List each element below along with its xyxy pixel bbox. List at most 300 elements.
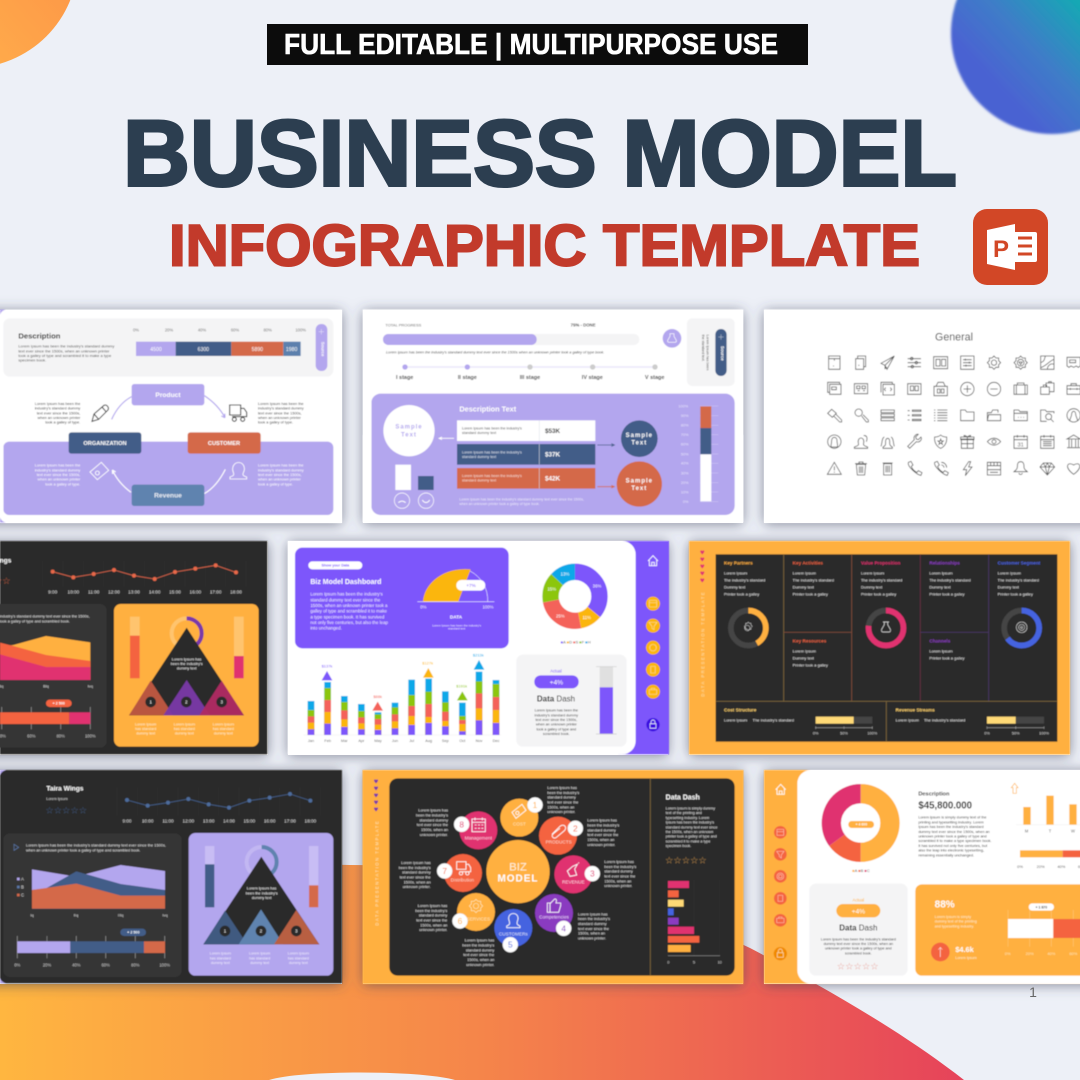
description block: Lorem Ipsum is simply dummy text of the: [918, 816, 986, 820]
heading: Taira Wings: [45, 786, 87, 817]
description block: scrambled it to make a type specimen book.: [918, 839, 992, 843]
slide: general icon set: [764, 309, 1080, 523]
stacked bar chart: Sep: [442, 739, 449, 743]
description block: dummy text ever since the 1500s, when an: [918, 830, 990, 834]
line chart: 12:00: [183, 819, 195, 824]
wheel text blocks: Lorem Ipsum has: [578, 912, 608, 916]
panel: area chart and bar: 100%: [159, 962, 170, 967]
panel: data dash: scrambled book.: [543, 732, 570, 736]
donut legend: ■A ■B ■C: [852, 868, 870, 873]
panel: description and stacked bar: Source: [320, 342, 325, 357]
panel: dashboard intro and gauge: a type specimen book. It has survived: [310, 614, 385, 619]
panel: area chart and bar: B: [21, 885, 24, 890]
text blocks around cycle: [35, 402, 304, 486]
wheel text blocks: text ever since the: [547, 800, 578, 804]
panel: dashboard intro and gauge: into unchanged.: [310, 626, 342, 631]
hearts: ♥: [700, 578, 705, 585]
panel: area chart and bar: 60%: [102, 962, 110, 967]
panel: pyramid chart: dummy text: [250, 961, 269, 965]
line chart: 10:00: [68, 590, 80, 595]
canvas board: Lorem Ipsum: [861, 570, 885, 575]
sidebar icons: [774, 784, 787, 960]
canvas board: Printer took a galley: [929, 655, 965, 660]
circle: sample text white: [383, 405, 435, 456]
wheel text blocks: 1500s, when an: [578, 932, 605, 936]
panel: area chart and bar: 20%: [43, 962, 51, 967]
stacked bar chart: $137k: [322, 663, 332, 668]
wheel text blocks: Lorem Ipsum has: [604, 860, 634, 864]
arrows to circles: [597, 444, 614, 446]
line chart: 17:00: [284, 819, 296, 824]
wheel text blocks: Lorem Ipsum has: [418, 809, 448, 813]
stacked progress column: 40%: [681, 462, 689, 466]
hearts: ♥: [373, 807, 379, 814]
icon: PowerPoint logo: [973, 209, 1048, 285]
description block: unknown printer took a galley of type and: [918, 834, 987, 838]
text blocks around cycle: text ever since the 1500s,: [37, 473, 80, 477]
panel: lavender description: when an unknown printer took a galley of type book.: [459, 502, 540, 506]
wheel text blocks: [399, 786, 636, 967]
wheel text blocks: text ever since the: [417, 823, 448, 827]
panel: pyramid chart: 1: [224, 929, 227, 934]
stacked bar chart: Jan: [308, 739, 314, 743]
wheel text blocks: Lorem Ipsum has: [465, 939, 494, 943]
line chart: 16:00: [264, 819, 276, 824]
vertical label: DATA PRESENTATION TEMPLATE: [374, 821, 379, 926]
panel: dashboard intro and gauge: Biz Model Dashboard: [310, 579, 381, 586]
hearts: ♥: [700, 571, 705, 578]
canvas board: Printer took a galley: [998, 592, 1033, 597]
stages timeline: V stage: [645, 375, 664, 381]
slide shadows: [0, 310, 1080, 984]
donut chart: [831, 794, 890, 852]
petal: competencies: Competencies: [539, 914, 570, 919]
description block: Description: [918, 791, 950, 797]
wheel text blocks: standard dummy: [466, 948, 494, 952]
canvas board: Printer took a galley: [929, 592, 965, 597]
table rows: standard dummy text: [462, 479, 496, 483]
wheel text blocks: unknown printer.: [419, 928, 447, 932]
gauge chart: +7%: [466, 583, 476, 588]
text blocks around cycle: text ever since the 1500s,: [37, 411, 80, 415]
icon: up arrow: [1011, 783, 1018, 793]
wheel text blocks: text ever since the: [587, 833, 618, 837]
text blocks around cycle: took a galley of type.: [258, 421, 293, 425]
slide: dark dashboard orange variant: [0, 541, 267, 754]
text blocks around cycle: when an unknown printer: [38, 478, 81, 482]
panel: area chart and bar: + 2 500: [127, 931, 139, 935]
icon: PowerPoint logo: P: [993, 236, 1009, 263]
panel: area chart and bar: 80%: [57, 733, 65, 738]
line chart: 9:00: [122, 819, 132, 824]
stacked progress column: 60%: [681, 443, 689, 447]
canvas board: Relationships: [929, 560, 960, 565]
table rows: Lorem Ipsum has been the industry's: [462, 450, 522, 454]
wheel text blocks: 1500s, when an: [421, 828, 448, 832]
panel: data dash: Data Dash: [839, 924, 877, 933]
decorative blue blob top right: [951, 0, 1080, 134]
line chart: 10:00: [142, 819, 154, 824]
gauge chart: [417, 569, 494, 631]
wheel text blocks: text ever since the: [604, 874, 635, 878]
panel: source note: Lorem Ipsum has been: [706, 335, 710, 370]
description block: It has survived not only five centuries, but: [918, 844, 988, 848]
canvas board: Dummy text: [861, 585, 883, 590]
panel: 88 percent stats: + 1 870: [1035, 905, 1047, 909]
line chart: 15:00: [169, 590, 181, 595]
panel: pyramid chart: dummy text: [289, 961, 308, 965]
table rows: Lorem Ipsum has been the industry's: [462, 474, 522, 478]
side panel: data dash: text of the printing and: [666, 811, 702, 815]
circle: sample text orange: Text: [631, 486, 647, 492]
panel: description and stacked bar: 4500: [150, 347, 162, 353]
wheel text blocks: 1500s, when an: [604, 879, 631, 883]
wheel text blocks: standard dummy: [419, 818, 448, 822]
panel: data dash: Lorem Ipsum has been the: [535, 709, 578, 713]
wheel diagram: [399, 786, 636, 967]
column chart: T: [1049, 828, 1052, 833]
panel: pyramid chart: Lorem Ipsum: [210, 952, 231, 956]
donut pill: [848, 821, 874, 828]
petal: cost: COST: [513, 822, 526, 827]
box: organization: [69, 432, 141, 454]
circle: sample text navy: Sample: [626, 433, 653, 439]
canvas board: Key Activities: [793, 560, 823, 565]
wheel text blocks: unknown printer.: [578, 936, 606, 940]
panel: dashboard intro and gauge: 1500s, when an unknown printer took a: [310, 603, 388, 608]
panel: pyramid chart: dummy text: [211, 961, 230, 965]
heading: partial title and stars: [0, 557, 12, 587]
donut chart: 25%: [556, 614, 565, 619]
column chart: [1016, 796, 1080, 833]
canvas board: Lorem Ipsum: [929, 648, 953, 653]
small bars and faces: [394, 465, 434, 508]
panel: 88 percent stats: Lorem Ipsum is simply: [935, 915, 971, 919]
number badges: [437, 797, 600, 952]
panel: pyramid chart: has standard: [249, 956, 270, 960]
stacked progress column: 50%: [681, 452, 689, 456]
gauge chart: standard text: [448, 627, 465, 631]
wheel text blocks: standard dummy: [578, 922, 607, 926]
title: BUSINESS MODEL: [123, 100, 957, 206]
progress bar: 0%: [1017, 864, 1023, 869]
text blocks around cycle: industry's standard dummy: [35, 468, 80, 472]
box: revenue: [132, 485, 204, 506]
text blocks around cycle: when an unknown printer: [258, 478, 301, 482]
panel: pyramid chart: has standard: [210, 956, 231, 960]
slide: business model canvas: [689, 541, 1070, 754]
icon: flask badge: [663, 329, 681, 348]
wheel text blocks: been the industry's: [415, 909, 447, 913]
donut chart: 36%: [593, 584, 601, 589]
wheel text blocks: been the industry's: [604, 865, 636, 869]
heading: Taira Wings: Taira Wings: [46, 786, 84, 793]
stacked progress column: 80%: [681, 424, 689, 428]
panel: area chart and bar: 80%: [131, 962, 140, 967]
table rows: $53K: [545, 428, 561, 435]
table rows: $37K: [545, 452, 561, 459]
side panel: data dash: printer took a galley of type and: [666, 835, 717, 839]
wheel text blocks: been the industry's: [399, 866, 431, 870]
canvas board: Dummy text: [929, 585, 951, 590]
gauge chart: Lorem Ipsum has been the industry's: [432, 623, 482, 627]
wheel text blocks: text ever since the: [578, 927, 609, 931]
side panel: data dash: specimen book.: [666, 844, 691, 848]
canvas board: Lorem Ipsum: [998, 570, 1022, 575]
canvas board: Key Partners: [724, 560, 753, 565]
petal: distribution: Distribution: [451, 878, 474, 883]
panel: dashboard intro and gauge: Show your Data: [322, 564, 350, 568]
progress bar: 40%: [1057, 864, 1066, 869]
panel: area chart and bar: 40%: [72, 962, 81, 967]
center: biz model: BIZ: [509, 861, 527, 873]
panel: description and stacked bar: took a galley of type and scrambled it to make a type: [18, 353, 112, 358]
donut: customer segment: [1004, 610, 1039, 645]
circle: sample text white: Text: [401, 432, 417, 438]
panel: pyramid chart: dummy text: [214, 732, 233, 736]
icon: pencil: [92, 405, 108, 421]
panel: pyramid chart: 3: [220, 700, 223, 705]
petal: revenue: [554, 855, 592, 893]
panel: pyramid chart: Lorem Ipsum has: [247, 887, 277, 891]
icon grid: [827, 356, 1080, 476]
canvas board: The industry's standard: [724, 577, 765, 582]
wheel text blocks: unknown printer.: [547, 810, 575, 814]
wheel text blocks: been the industry's: [578, 917, 610, 921]
stacked progress column: 90%: [681, 414, 689, 418]
heading: Taira Wings: Lorem Ipsum: [46, 797, 68, 801]
canvas board: Printer took a galley: [724, 592, 759, 597]
wheel text blocks: unknown printer.: [604, 884, 632, 888]
column chart: W: [1071, 828, 1075, 833]
cost structure and revenue streams: 100%: [867, 732, 878, 736]
cost structure and revenue streams: 50%: [1012, 732, 1020, 736]
panel: 88 percent stats: and typesetting industry.: [935, 924, 974, 928]
stacked progress column: 0%: [683, 500, 689, 504]
line chart: 14:00: [223, 819, 235, 824]
wheel text blocks: 1500s, when an: [420, 923, 447, 927]
hearts: ♥: [700, 557, 705, 564]
horizontal bar chart: 5: [693, 960, 696, 965]
line chart: 11:00: [88, 590, 100, 595]
wheel diagram: 1: [533, 800, 538, 810]
panel: pyramid chart: Lorem Ipsum has: [172, 657, 202, 661]
cost structure and revenue streams: 100%: [1039, 732, 1049, 736]
canvas board: The industry's standard: [793, 577, 834, 582]
wheel diagram: 3: [590, 869, 595, 879]
text blocks around cycle: Lorem Ipsum has been the: [35, 402, 80, 406]
panel: 88 percent stats: [915, 884, 1080, 976]
canvas board: Dummy text: [724, 585, 746, 590]
slide: biz model dashboard: [288, 541, 669, 754]
panel: dashboard intro and gauge: Lorem Ipsum has been the industry's: [310, 592, 383, 597]
canvas board: Dummy text: [793, 585, 815, 590]
hearts: ♥: [700, 564, 705, 571]
panel: 88 percent stats: 0%: [1005, 951, 1011, 956]
side panel: data dash: typesetting industry. Lorem: [666, 816, 709, 820]
vertical label: DATA PRESENTATION TEMPLATE: [700, 592, 705, 697]
hearts: ♥: [373, 786, 379, 793]
horizontal bar chart: 0: [667, 960, 670, 965]
canvas board: Printer took a galley: [793, 663, 828, 668]
stages timeline: I stage: [396, 375, 413, 381]
box: organization: ORGANIZATION: [83, 441, 127, 447]
line chart: 9:00: [48, 590, 58, 595]
panel: data dash: [516, 655, 627, 747]
horizontal bar chart: 10: [717, 960, 723, 965]
petal: services: SERVICES: [467, 917, 490, 922]
panel: description and stacked bar: 6300: [198, 347, 209, 353]
hearts: ♥: [373, 800, 379, 807]
canvas board: Key Resources: [793, 638, 827, 643]
panel: area chart and bar: Ivq: [88, 683, 93, 688]
petal: products: PRODUCTS: [546, 839, 572, 844]
cost structure and revenue streams: The industry's standard: [924, 718, 965, 723]
cost structure and revenue streams: 50%: [840, 732, 848, 736]
wheel text blocks: standard dummy: [402, 871, 431, 875]
wheel text blocks: unknown printer.: [466, 963, 494, 967]
description block: also the leap into electronic typesetting,: [918, 849, 984, 853]
text blocks around cycle: took a galley of type.: [45, 421, 80, 425]
stacked bar chart: $191k: [456, 684, 467, 689]
stacked progress column: 20%: [681, 481, 689, 485]
panel: 88 percent stats: 20%: [1026, 951, 1034, 956]
decorative gradient wave at the bottom: [0, 864, 964, 1080]
side panel: data dash: Lorem Ipsum is simply dummy: [666, 806, 715, 810]
progress header: Lorem Ipsum has been the industry's standard dummy text ever since the 1500s when an unknown printer took a galley of type book.: [386, 350, 604, 354]
hearts: ♥: [700, 550, 705, 557]
table rows: Lorem Ipsum has been the industry's: [462, 426, 522, 430]
canvas board: [716, 554, 1057, 742]
wheel diagram: 6: [458, 916, 463, 926]
canvas board: Lorem Ipsum: [929, 570, 953, 575]
wheel text blocks: text ever since the: [400, 875, 431, 879]
top banner: FULL EDITABLE | MULTIPURPOSE USE: [284, 29, 778, 61]
wheel text blocks: standard dummy: [587, 828, 616, 832]
donut: value proposition: [868, 610, 903, 645]
text blocks around cycle: text ever since the 1500s,: [258, 473, 302, 477]
line chart: 13:00: [128, 590, 140, 595]
canvas board: Printer took a galley: [793, 592, 828, 597]
panel: pyramid chart: Lorem Ipsum: [213, 722, 234, 726]
side panel: data dash: ☆☆☆☆☆: [665, 856, 707, 867]
text blocks around cycle: Lorem Ipsum has been the: [35, 464, 80, 468]
heading: Taira Wings: ☆☆☆☆☆: [45, 806, 87, 817]
box: revenue: Revenue: [154, 493, 182, 500]
text blocks around cycle: took a galley of type.: [45, 482, 80, 486]
gauge chart: DATA: [450, 615, 463, 620]
slide: biz model wheel: [363, 770, 743, 984]
panel: data dash: Actual: [853, 898, 864, 903]
wheel text blocks: Lorem Ipsum has: [418, 904, 447, 908]
panel: source note: Source: [720, 346, 725, 361]
line chart: 18:00: [305, 819, 317, 824]
sidebar icons: [646, 556, 660, 731]
line chart: 17:00: [210, 590, 222, 595]
line chart: 14:00: [149, 590, 161, 595]
cost structure and revenue streams: Revenue Streams: [896, 708, 935, 713]
panel: pyramid chart: dummy text: [136, 732, 155, 736]
icon: truck: [230, 405, 247, 421]
stages timeline: III stage: [520, 375, 540, 381]
text blocks around cycle: took a galley of type.: [258, 482, 293, 486]
wheel text blocks: unknown printer.: [403, 885, 431, 889]
wheel text blocks: 1500s, when an: [467, 958, 494, 962]
panel: data dash: Actual: [550, 669, 562, 674]
panel: data dash: [809, 884, 908, 976]
circle: sample text white: Sample: [395, 425, 423, 431]
panel: area chart and bar: IIq: [74, 913, 78, 918]
wheel text blocks: been the industry's: [547, 791, 579, 795]
table rows: standard dummy text: [462, 431, 496, 435]
wheel text blocks: been the industry's: [587, 823, 619, 827]
stacked bar chart: $88k: [373, 694, 382, 699]
canvas board: Printer took a galley: [861, 592, 896, 597]
panel: area chart and bar: [3, 833, 182, 977]
panel: lavender lower area: [3, 442, 333, 515]
line chart: 12:00: [108, 590, 120, 595]
panel: area chart and bar: Blq: [43, 683, 49, 688]
cost structure and revenue streams: Lorem Ipsum: [724, 718, 748, 723]
text blocks around cycle: Lorem Ipsum has been the: [258, 464, 304, 468]
subtitle: INFOGRAPHIC TEMPLATE: [169, 214, 920, 278]
wheel text blocks: 1500s, when an: [587, 838, 614, 842]
panel: 88 percent stats: 88%: [935, 900, 955, 911]
wheel text blocks: 1500s, when an: [547, 805, 574, 809]
stacked progress column: 70%: [681, 433, 689, 437]
panel: area chart and bar: + 2 500: [53, 702, 65, 706]
box: product: Product: [155, 392, 181, 399]
table rows: [457, 420, 595, 489]
box: customer: CUSTOMER: [208, 441, 240, 447]
text blocks around cycle: industry's standard dummy: [258, 407, 304, 411]
wheel text blocks: text ever since the: [416, 918, 447, 922]
line chart: 16:00: [190, 590, 202, 595]
wheel diagram: 4: [561, 923, 566, 933]
stacked bar chart: $127k: [422, 661, 433, 666]
panel: 88 percent stats: 60%: [1069, 951, 1078, 956]
panel: data dash: when an unknown printer: [536, 723, 578, 727]
panel: dashboard intro and gauge: not only five centuries, but also the leap: [310, 620, 389, 625]
panel: 88 percent stats: dummy text of the printing: [935, 920, 977, 924]
donut chart: 11%: [582, 615, 591, 620]
circle: sample text navy: Text: [631, 441, 647, 447]
circle: sample text navy: [621, 420, 658, 457]
stacked bar chart: Jun: [392, 739, 398, 743]
panel: pyramid chart: been the industry's: [246, 891, 278, 895]
line chart: [43, 561, 246, 595]
stacked bar chart: Dec: [493, 739, 499, 743]
progress bar: 20%: [1037, 864, 1045, 869]
panel: description and stacked bar: 5890: [252, 347, 263, 353]
wheel text blocks: been the industry's: [462, 943, 494, 947]
petal: customers: CUSTOMERs: [499, 931, 528, 936]
panel: source note: the standard text.: [701, 335, 705, 362]
slide: dark dashboard lavender variant: [0, 770, 342, 983]
panel: area chart and bar: took a galley of type and scrambled book.: [0, 619, 70, 623]
canvas board: The industry's standard: [998, 577, 1039, 582]
panel: pyramid chart: been the industry's: [171, 662, 203, 666]
panel: description and stacked bar: Lorem Ipsum has been the industry's standard dummy: [18, 344, 114, 349]
panel: pyramid chart: [189, 833, 333, 976]
panel: pyramid chart: has standard: [213, 727, 234, 731]
stacked bar chart: $213k: [473, 653, 484, 658]
arrow: to white circle: [439, 437, 454, 440]
stacked progress column: 10%: [681, 490, 689, 494]
panel: description and stacked bar: text ever since the 1500s, when an unknown printer: [18, 348, 110, 353]
panel: area chart and bar: [0, 604, 107, 748]
panel: pyramid chart: has standard: [174, 727, 195, 731]
